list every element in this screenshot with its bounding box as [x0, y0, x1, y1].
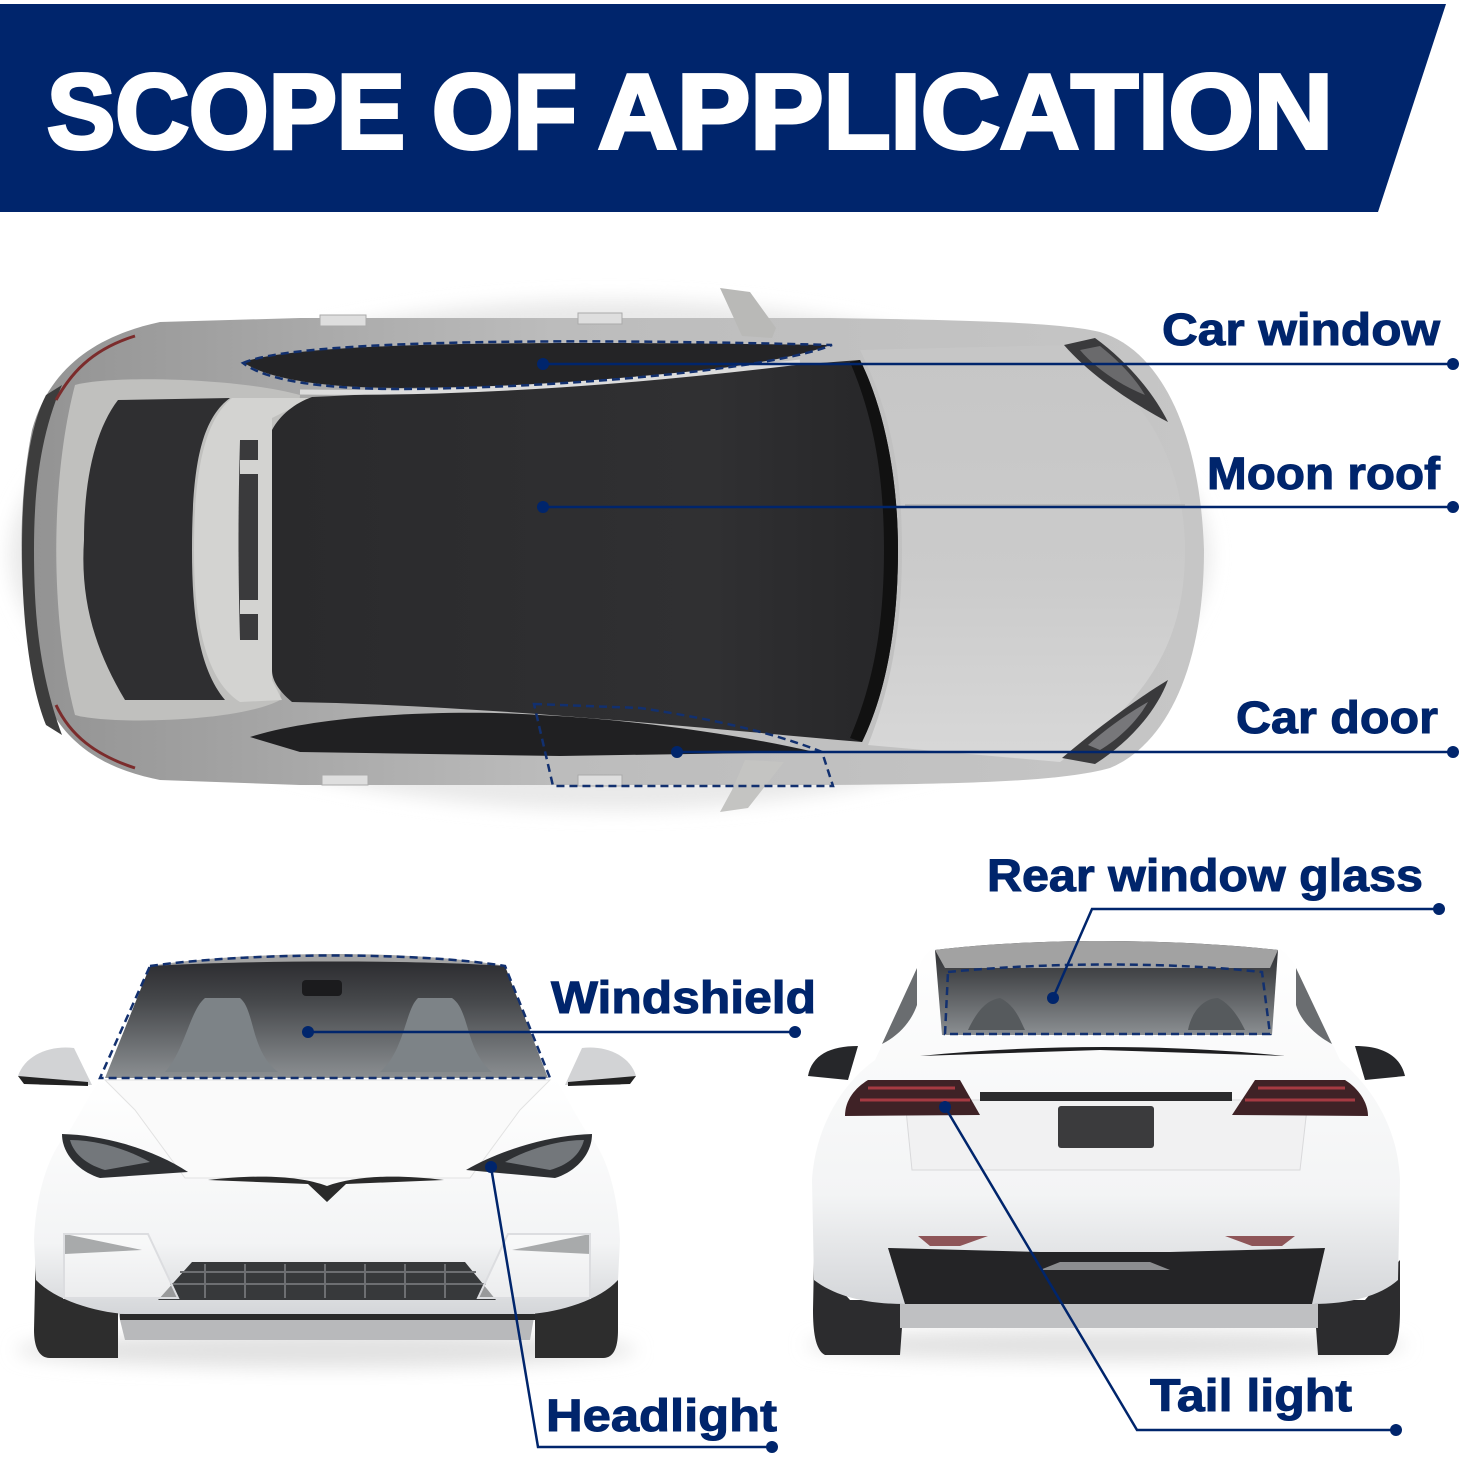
nose badge line	[208, 1177, 444, 1202]
label: Windshield	[302, 972, 816, 1038]
title	[47, 53, 1333, 171]
ground shadow	[16, 1332, 636, 1368]
spoiler	[920, 1047, 1285, 1056]
door handles	[320, 313, 622, 786]
dashed outline rear window	[945, 964, 1270, 1034]
tail light left	[845, 1080, 980, 1116]
label: Headlight	[485, 1161, 778, 1453]
spoiler frame	[194, 398, 312, 702]
grille	[158, 1262, 496, 1300]
title: SCOPE	[47, 53, 405, 171]
top view car	[10, 288, 1210, 812]
mirrors	[18, 1047, 92, 1085]
dashed outline door	[534, 704, 833, 786]
headlight right	[466, 1134, 592, 1178]
label: Rear window glass: Rear window glass	[987, 850, 1423, 901]
roof	[150, 954, 505, 966]
label: Tail light: Tail light	[1150, 1370, 1352, 1421]
title: APPLICATION	[598, 53, 1333, 171]
wheels	[34, 1240, 618, 1358]
quarter windows	[882, 968, 1332, 1044]
moon roof	[272, 360, 898, 742]
label: Moon roof	[537, 448, 1459, 513]
label: Car window: Car window	[1162, 304, 1441, 355]
seats	[165, 998, 492, 1072]
rear dark edge	[22, 385, 62, 735]
ground shadow	[806, 1329, 1406, 1361]
lower side window	[250, 713, 815, 756]
title banner	[0, 4, 1446, 212]
light rear deck	[56, 379, 300, 720]
wheels	[813, 1260, 1400, 1355]
lower bumper	[888, 1248, 1325, 1304]
title: OF	[432, 53, 577, 171]
rear red strip	[56, 336, 135, 768]
headlight lower	[1062, 680, 1168, 764]
mirror lower	[720, 760, 784, 812]
mirror upper	[720, 288, 776, 338]
sill upper highlight	[300, 362, 800, 392]
label: Car window	[537, 304, 1459, 370]
shadow	[10, 300, 1210, 810]
headlight left	[62, 1134, 188, 1178]
label: Windshield: Windshield	[551, 972, 816, 1023]
under body	[118, 1312, 535, 1340]
tail light right	[1232, 1080, 1368, 1116]
car body	[22, 318, 1204, 785]
front view car	[16, 954, 636, 1368]
rear view car	[806, 940, 1406, 1361]
dashed outline window	[243, 341, 832, 389]
upper side window	[243, 343, 830, 388]
label: Tail light	[939, 1101, 1402, 1436]
trunk panel	[905, 1100, 1308, 1170]
dashed outline windshield	[100, 956, 550, 1078]
mirrors	[808, 1046, 1405, 1080]
hood	[860, 345, 1185, 762]
body	[34, 1078, 620, 1314]
windshield glass	[105, 958, 548, 1078]
body	[812, 940, 1400, 1304]
rear window	[83, 398, 230, 700]
label: Headlight: Headlight	[546, 1390, 777, 1441]
label: Car door: Car door	[1236, 692, 1438, 743]
label: Rear window glass	[987, 850, 1445, 1004]
label: Moon roof: Moon roof	[1207, 448, 1441, 499]
rear glass	[935, 941, 1278, 1035]
headlight upper	[1064, 338, 1168, 422]
license plate	[1058, 1106, 1154, 1148]
label: Car door	[671, 692, 1459, 758]
fog lights	[65, 1234, 590, 1254]
